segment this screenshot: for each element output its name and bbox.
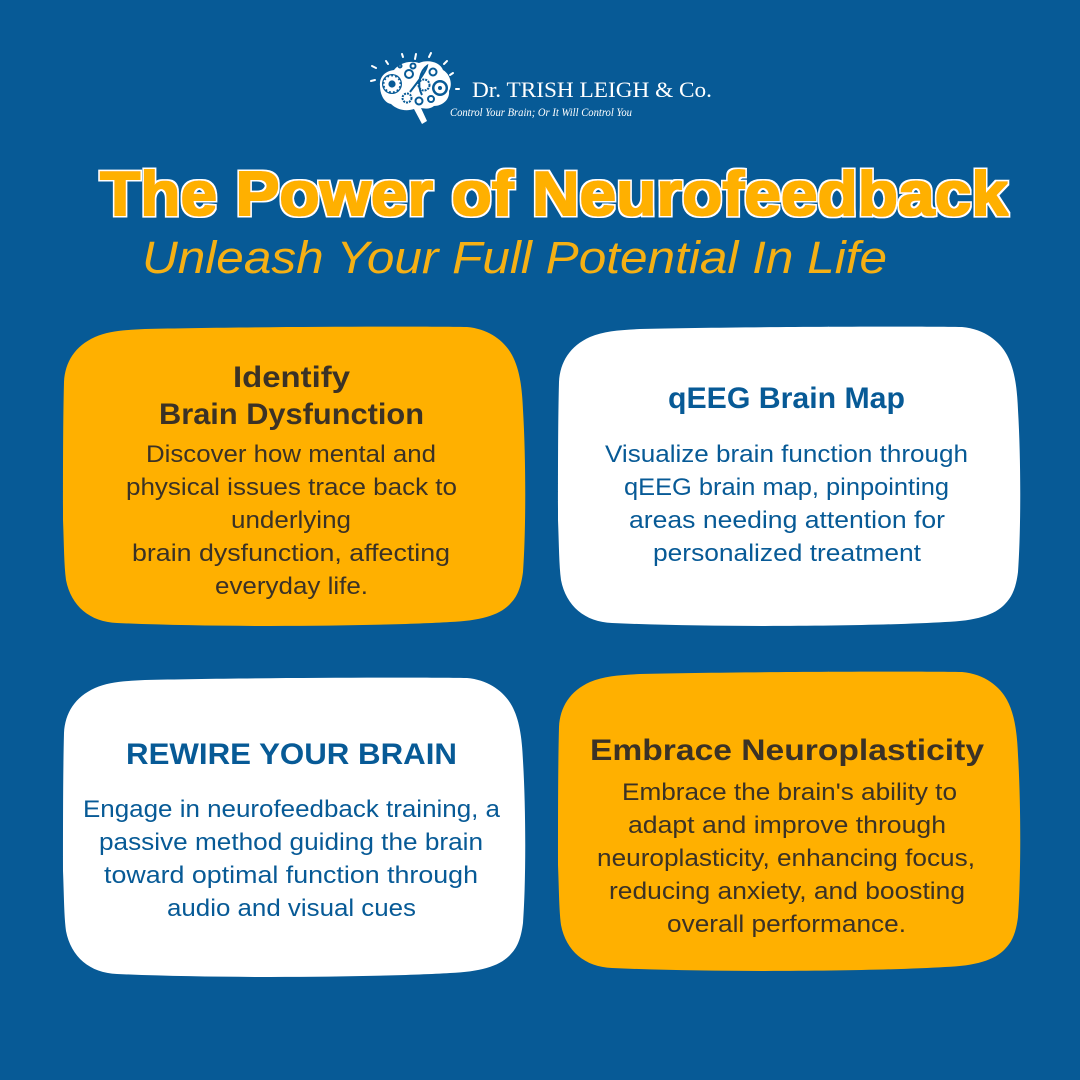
heading: qEEG Brain Map — [668, 382, 905, 415]
icon: brain with gears — [371, 53, 459, 124]
body text: physical issues trace back to — [126, 474, 457, 501]
body text: everyday life. — [215, 573, 368, 600]
body text — [597, 779, 975, 938]
panel: rewire your brain — [63, 678, 525, 977]
panel: embrace neuroplasticity — [558, 672, 1020, 971]
body text: audio and visual cues — [167, 895, 416, 922]
body text: Engage in neurofeedback training, a — [83, 796, 501, 823]
heading — [159, 361, 424, 431]
heading: Embrace Neuroplasticity — [590, 734, 984, 767]
body text: qEEG brain map, pinpointing — [624, 474, 949, 501]
body text: Visualize brain function through — [605, 441, 968, 468]
body text: personalized treatment — [653, 540, 921, 567]
body text: areas needing attention for — [629, 507, 945, 534]
heading: Identify — [233, 361, 350, 394]
body text: passive method guiding the brain — [99, 829, 483, 856]
body text: neuroplasticity, enhancing focus, — [597, 845, 975, 872]
body text — [126, 441, 457, 600]
heading: REWIRE YOUR BRAIN — [126, 738, 457, 771]
body text: Embrace the brain's ability to — [622, 779, 957, 806]
body text: adapt and improve through — [628, 812, 946, 839]
body text: reducing anxiety, and boosting — [609, 878, 965, 905]
panel: identify brain dysfunction — [63, 327, 525, 626]
title: The Power of Neurofeedback — [100, 160, 1009, 229]
body text: overall performance. — [667, 911, 906, 938]
logo wordmark: Dr. TRISH LEIGH & Co. — [472, 77, 712, 102]
body text: Discover how mental and — [146, 441, 436, 468]
body text — [83, 796, 501, 922]
subtitle: Unleash Your Full Potential In Life — [142, 232, 887, 283]
logo tagline: Control Your Brain; Or It Will Control You — [450, 105, 632, 119]
panel: qEEG brain map — [558, 327, 1020, 626]
body text: underlying — [231, 507, 351, 534]
heading: Brain Dysfunction — [159, 398, 424, 431]
body text: toward optimal function through — [104, 862, 478, 889]
logo — [371, 53, 712, 124]
body text — [605, 441, 968, 567]
body text: brain dysfunction, affecting — [132, 540, 450, 567]
